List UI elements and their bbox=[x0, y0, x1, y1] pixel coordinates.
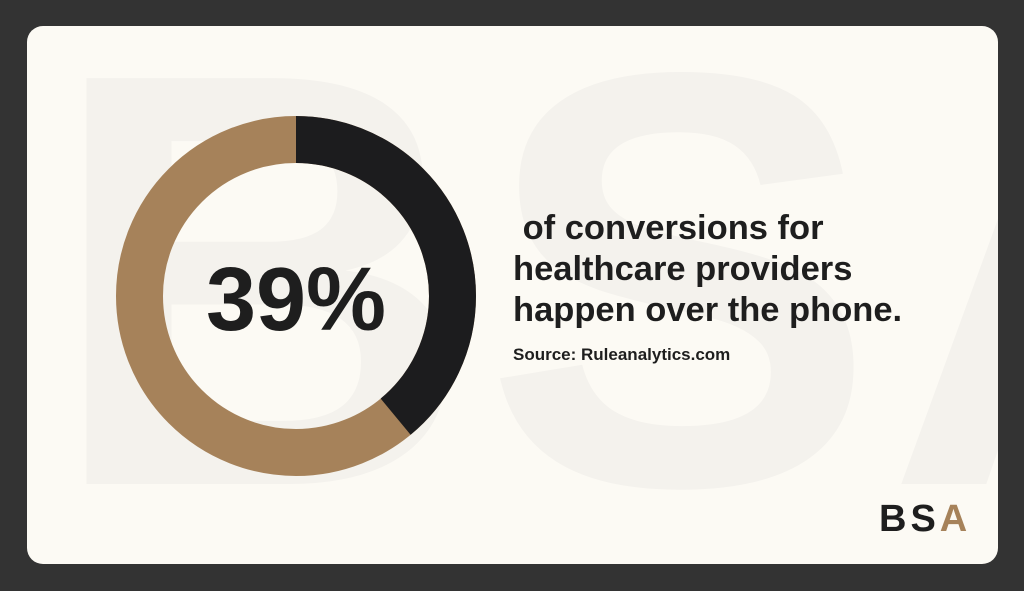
logo: BSA bbox=[879, 498, 971, 540]
statement text: happen over the phone. bbox=[513, 291, 902, 329]
statement text bbox=[513, 209, 902, 329]
donut chart: 39% bbox=[206, 250, 386, 350]
statement text: of conversions for bbox=[523, 209, 824, 247]
source: Source: Ruleanalytics.com bbox=[513, 345, 730, 364]
statement text: healthcare providers bbox=[513, 250, 852, 288]
